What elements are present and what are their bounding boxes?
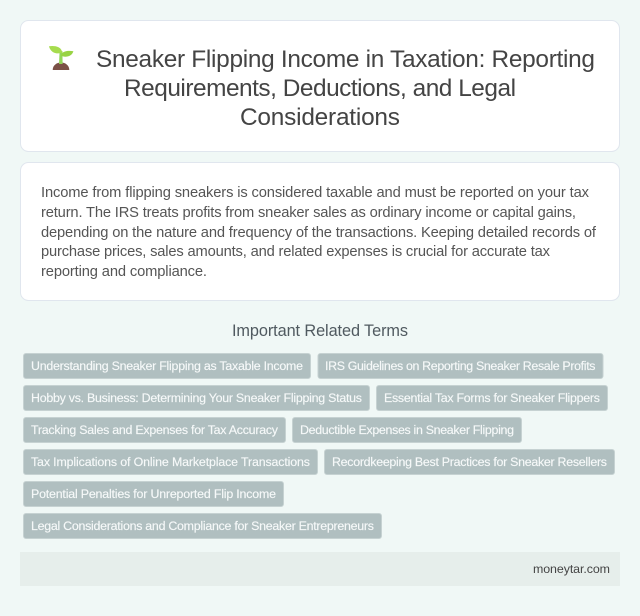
tag	[24, 450, 318, 474]
footer: moneytar.com	[533, 562, 610, 576]
tag	[292, 418, 522, 442]
text block: description: purchase prices, sales amounts, and related expenses is crucial for accurate tax	[41, 244, 551, 260]
tag	[318, 354, 603, 378]
tag	[24, 418, 286, 442]
text block: description: reporting and compliance.	[41, 264, 207, 280]
title: Considerations	[240, 104, 400, 131]
text block: description: Income from flipping sneakers is considered taxable and must be reported on your tax	[41, 185, 590, 201]
tag: IRS Guidelines on Reporting Sneaker Resale Profits	[325, 359, 596, 373]
text block: description: return. The IRS treats profits from sneaker sales as ordinary income or capital gains,	[41, 205, 576, 221]
title: Sneaker Flipping Income in Taxation: Reporting	[96, 46, 595, 73]
text block: description	[41, 185, 597, 280]
tag: Legal Considerations and Compliance for Sneaker Entrepreneurs	[31, 519, 374, 533]
tag: Essential Tax Forms for Sneaker Flippers	[384, 391, 600, 405]
icon: sprout	[49, 46, 73, 70]
tag	[24, 354, 310, 378]
tag	[24, 386, 370, 410]
text block: description: depending on the nature and frequency of the transactions. Keeping detailed records of	[41, 225, 597, 241]
tag: Hobby vs. Business: Determining Your Sneaker Flipping Status	[31, 391, 362, 405]
tag	[24, 514, 382, 538]
heading: important related terms: Important Related Terms	[232, 322, 408, 340]
tag	[376, 386, 608, 410]
tag: Potential Penalties for Unreported Flip Income	[31, 487, 276, 501]
tag: Tracking Sales and Expenses for Tax Accuracy	[31, 423, 279, 437]
tag: Deductible Expenses in Sneaker Flipping	[300, 423, 514, 437]
panel: title card	[20, 20, 620, 152]
title: Requirements, Deductions, and Legal	[124, 75, 516, 102]
tag: Tax Implications of Online Marketplace Transactions	[31, 455, 310, 469]
tag	[24, 482, 284, 506]
footer	[20, 552, 620, 586]
tag: Recordkeeping Best Practices for Sneaker Resellers	[332, 455, 607, 469]
panel: description card	[20, 162, 620, 300]
panel: related term tags	[24, 354, 614, 538]
tag: Understanding Sneaker Flipping as Taxable Income	[31, 359, 303, 373]
title	[96, 46, 595, 131]
tag	[324, 450, 614, 474]
